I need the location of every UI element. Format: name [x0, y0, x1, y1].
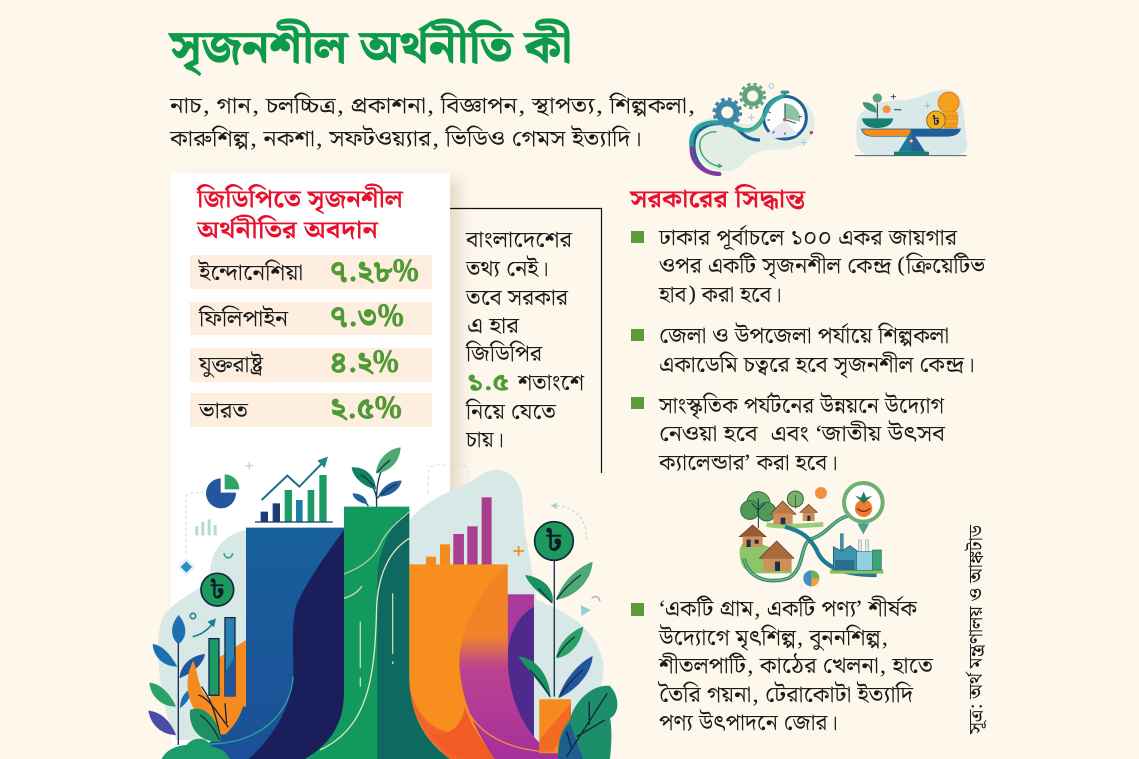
note box: Bangladesh: শতাংশে [517, 367, 586, 402]
decision: creative hub in Dhaka: ঢাকার পূর্বাচলে ১০০ একর জায়গার [658, 222, 958, 257]
plant: right with taka coin [518, 519, 600, 753]
panel: GDP contribution [171, 173, 460, 759]
source note: সূত্র: অর্থ মন্ত্রণালয় ও আঙ্কটাড [961, 524, 992, 735]
decision: cultural tourism: সাংস্কৃতিক পর্যটনের উন্নয়নে উদ্যোগ [658, 390, 945, 425]
intro text: নাচ, গান, চলচ্চিত্র, প্রকাশনা, বিজ্ঞাপন, স্থাপত্য, শিল্পকলা, [169, 90, 695, 125]
bars: mini pale chart [195, 519, 217, 535]
decision: one village one product: শীতলপাটি, কাঠের খেলনা, হাতে [658, 650, 934, 685]
plant: right foreground leaf [558, 686, 617, 759]
note box: Bangladesh: ১.৫ [467, 365, 509, 403]
bars: on orange column [426, 497, 492, 565]
decision: cultural tourism: ক্যালেন্ডার’ করা হবে। [658, 447, 838, 482]
icon: stopwatch and gears [690, 84, 815, 174]
row: India [190, 386, 432, 434]
heading: government decisions: সরকারের সিদ্ধান্ত [629, 180, 807, 220]
decision: creative hub in Dhaka: ওপর একটি সৃজনশীল কেন্দ্র (ক্রিয়েটিভ [659, 250, 986, 285]
bars: on blue column with arrow [255, 457, 333, 523]
plant: orange leaf and greens [162, 661, 246, 759]
title: সৃজনশীল অর্থনীতি কী [168, 13, 572, 86]
column: green [305, 507, 450, 759]
panel heading: অর্থনীতির অবদান [196, 211, 380, 251]
row: USA: ৪.২% [330, 340, 399, 388]
column: purple [508, 594, 534, 741]
note box: Bangladesh: তথ্য নেই। [465, 253, 549, 288]
decision: creative hub in Dhaka [631, 222, 986, 314]
intro text [169, 90, 695, 158]
coin: taka left [201, 571, 234, 612]
row: Indonesia: ইন্দোনেশিয়া [198, 257, 303, 292]
note box: Bangladesh: বাংলাদেশের [465, 224, 573, 259]
icon: balance scale: ৳ [932, 112, 940, 132]
decision: one village one product [631, 593, 934, 742]
decision: cultural tourism: নেওয়া হবে এবং ‘জাতীয় উৎসব [659, 418, 946, 453]
coin: taka left: ৳ [209, 571, 225, 612]
illustration: growth columns [148, 447, 617, 759]
decision: district centres [631, 320, 975, 384]
row: Philippines [190, 294, 432, 342]
row: India: ভারত [198, 395, 249, 430]
row: USA [190, 340, 432, 388]
row: Philippines: ফিলিপাইন [198, 303, 290, 338]
note box: Bangladesh: নিয়ে যেতে [465, 396, 557, 431]
icon: village and factory map [739, 483, 883, 586]
decision: one village one product: পণ্য উৎপাদনে জোর। [659, 707, 838, 742]
row: Indonesia: ৭.২৮% [330, 249, 419, 297]
decision: district centres: জেলা ও উপজেলা পর্যায়ে শিল্পকলা [659, 320, 949, 355]
panel heading [196, 180, 404, 251]
intro text: কারুশিল্প, নকশা, সফটওয়্যার, ভিডিও গেমস ইত্যাদি। [169, 123, 642, 158]
panel heading: জিডিপিতে সৃজনশীল [196, 180, 404, 220]
note box: Bangladesh: তবে সরকার [465, 282, 569, 317]
note box: Bangladesh: চায়। [465, 424, 504, 459]
note box: Bangladesh: এ হার [467, 310, 520, 345]
icon: balance scale [855, 90, 967, 156]
row: India: ২.৫% [330, 386, 402, 434]
row: Indonesia [190, 249, 432, 297]
decision: cultural tourism [631, 390, 946, 482]
row: Philippines: ৭.৩% [330, 294, 404, 342]
decision: creative hub in Dhaka: হাব) করা হবে। [658, 279, 782, 314]
column: orange [409, 564, 575, 759]
note box: Bangladesh: জিডিপির [465, 338, 543, 373]
chart icon: pie [206, 474, 239, 508]
bars: left small chart [209, 618, 246, 707]
decision: district centres: একাডেমি চত্বরে হবে সৃজনশীল কেন্দ্র। [659, 349, 975, 384]
row: USA: যুক্তরাষ্ট্র [198, 349, 265, 384]
plant: left blue and green [148, 613, 216, 745]
decision: one village one product: তৈরি গয়না, টেরাকোটা ইত্যাদি [658, 679, 914, 714]
plant on green column [352, 447, 402, 507]
note box: Bangladesh [450, 208, 602, 473]
decision: one village one product: ‘একটি গ্রাম, একটি পণ্য’ শীর্ষক [659, 593, 919, 628]
decision: one village one product: উদ্যোগে মৃৎশিল্প, বুননশিল্প, [658, 622, 888, 657]
plant: right with taka coin: ৳ [545, 519, 563, 566]
column: blue [180, 528, 344, 759]
